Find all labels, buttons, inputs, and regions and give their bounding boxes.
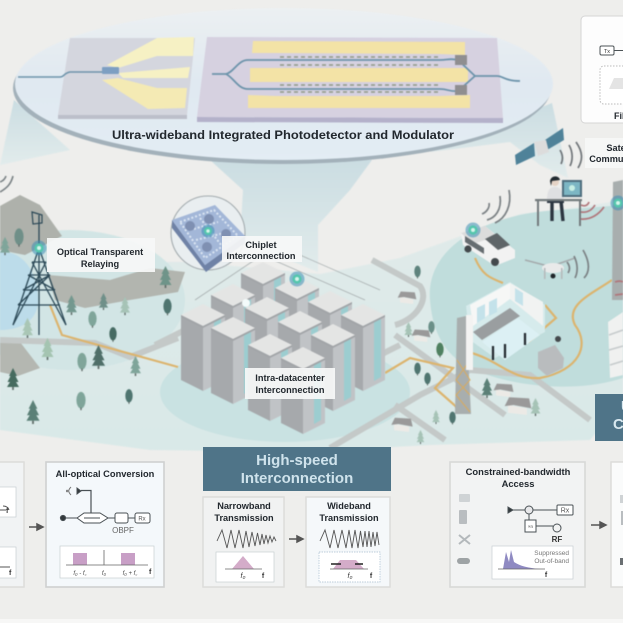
label: chiplet: Chiplet (245, 240, 277, 250)
label: chiplet: Interconnection (227, 251, 296, 261)
narrow spectrum: f (262, 573, 265, 580)
device icons (457, 494, 470, 564)
label: optical relaying (47, 238, 155, 272)
wide spectrum: f (370, 573, 373, 580)
van (461, 222, 515, 266)
light beam to chiplet (210, 160, 372, 272)
panel: fibre inset top right: Tx (604, 49, 610, 55)
arrow: narrowband to wideband (289, 536, 303, 542)
wide spectrum: f₀ (348, 573, 352, 580)
arrow: constrained to next (591, 522, 606, 528)
node: rack white (242, 299, 250, 307)
panel: wideband transmission (306, 497, 390, 587)
spectrum chart: f₀ + f꜀ (123, 571, 138, 577)
panel: left partial: f (9, 570, 12, 577)
panel: narrowband transmission: Transmission (214, 513, 274, 523)
panel: all-optical conversion (46, 462, 164, 587)
white edge building (608, 312, 623, 378)
operator at desk (535, 176, 582, 226)
radio tower: relay (13, 212, 66, 335)
label: satellite (585, 138, 623, 168)
panel: right partial (611, 462, 623, 587)
panel: left partial: f (6, 508, 9, 515)
suppressed spectrum: f (545, 572, 548, 579)
title: All-optical Conversion (56, 469, 155, 479)
header: high-speed interconnection: High-speed (256, 452, 338, 469)
panel: constrained-bandwidth access: RF (552, 535, 562, 544)
node: rack green (290, 272, 304, 286)
panel: narrowband transmission: Narrowband (217, 501, 271, 511)
label: intra-datacenter (245, 368, 335, 399)
ground terrain (0, 200, 623, 452)
modulator chip (197, 37, 520, 123)
panel: narrowband transmission (203, 497, 284, 587)
arrow: left to all-optical (29, 524, 43, 530)
narrow spectrum: f₀ (241, 573, 245, 580)
satellite (515, 128, 564, 165)
panel: constrained-bandwidth access: ×n (528, 524, 534, 529)
narrow spectrum (216, 552, 274, 582)
header: high-speed interconnection (203, 447, 391, 491)
panel: constrained-bandwidth access: Constrained-bandwidth (466, 466, 571, 477)
chirp waveform (217, 530, 276, 548)
optical fibre routes (50, 258, 612, 410)
label: chiplet (222, 236, 302, 262)
label: intra-datacenter: Interconnection (256, 385, 325, 395)
caption: device: Ultra-wideband Integrated Photodetector and Modulator (112, 128, 454, 142)
panel: all-optical conversion: OBPF (112, 526, 134, 535)
roads (0, 260, 590, 448)
houses (391, 292, 531, 432)
suppressed spectrum (492, 546, 573, 579)
node: relay (32, 240, 46, 256)
smart factory building (466, 282, 564, 376)
datacenter racks (181, 255, 385, 434)
wireless arcs: desk (581, 202, 604, 219)
spectrum chart (60, 546, 154, 578)
mobile tower: centre (455, 315, 473, 414)
wireless arcs: right tower (615, 281, 623, 295)
chiplet inset (171, 196, 245, 272)
header: right column (595, 394, 623, 441)
mobile tower: right (610, 180, 623, 300)
suppressed spectrum: Suppressed (534, 550, 569, 557)
panel: all-optical conversion: Rx (138, 516, 146, 522)
wireless arcs: relay (0, 176, 13, 192)
panel: constrained-bandwidth access: Access (502, 478, 534, 489)
wide spectrum (319, 552, 380, 582)
drone (525, 258, 575, 279)
lake (0, 252, 38, 330)
spectrum chart: f₀ (102, 571, 107, 577)
panel: constrained-bandwidth access: Rx (561, 508, 570, 514)
wireless arcs: satellite (560, 142, 582, 168)
wireless arcs: van (482, 190, 510, 223)
spectrum chart: f (149, 569, 152, 576)
label: optical relaying: Optical Transparent (57, 247, 143, 257)
suppressed spectrum: Out-of-band (534, 558, 569, 565)
wireless arcs: drone (567, 250, 588, 278)
light beam to right (430, 103, 568, 178)
panel: left partial (0, 462, 24, 587)
chirp waveform (320, 530, 379, 548)
label: optical relaying: Relaying (81, 259, 119, 269)
trees (0, 228, 540, 444)
panel: constrained-bandwidth access (450, 462, 585, 587)
panel: wideband transmission: Transmission (319, 513, 379, 523)
block diagram (60, 487, 150, 523)
header: high-speed interconnection: Interconnection (241, 470, 353, 487)
light beam to left (0, 100, 70, 165)
disc: device platform (13, 8, 553, 164)
panel: fibre inset top right (581, 16, 623, 123)
photodetector chip (18, 37, 195, 119)
receiver diagram (508, 505, 573, 532)
mountains (0, 195, 185, 376)
panel: wideband transmission: Wideband (327, 501, 371, 511)
spectrum chart: f₀ - f꜀ (73, 571, 88, 577)
bottom edge (0, 619, 623, 623)
label: intra-datacenter: Intra-datacenter (255, 373, 325, 383)
